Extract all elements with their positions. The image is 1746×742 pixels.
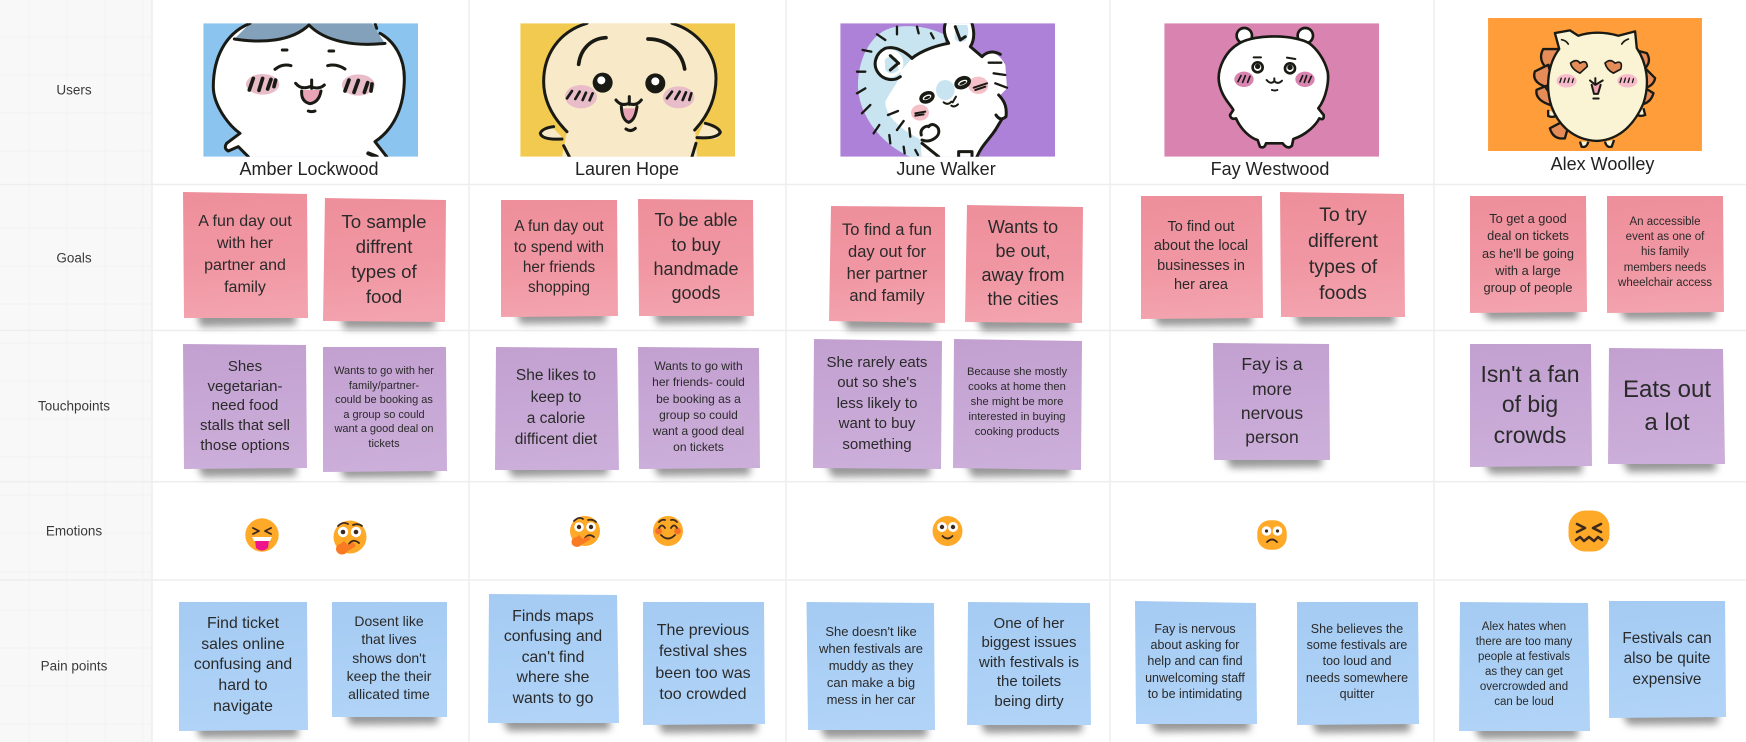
sticky: Amber pain 2	[332, 602, 447, 725]
sticky: Amber touchpoint 2: want a good deal on	[333, 423, 434, 435]
sticky: Alex pain 2: Festivals can	[1622, 630, 1712, 646]
avatar: Amber Lockwood	[203, 23, 418, 157]
emoji: confounded	[1568, 510, 1610, 552]
sticky: Amber touchpoint 2: tickets	[368, 438, 400, 450]
sticky: Alex pain 1: can be loud	[1494, 696, 1554, 708]
sticky: Alex goal 1: To get a good	[1489, 210, 1567, 226]
sticky: Alex goal 2: his family	[1641, 246, 1689, 258]
sticky: June pain 1: mess in her car	[827, 692, 916, 706]
sticky: June pain 2: biggest issues	[981, 634, 1077, 650]
sticky: Lauren goal 1: shopping	[528, 278, 590, 296]
sticky: Alex touchpoint 2: a lot	[1644, 408, 1690, 436]
name: Fay Westwood: Fay Westwood	[1211, 159, 1329, 179]
sticky: June pain 2: with festivals is	[978, 654, 1079, 670]
sticky: Lauren pain 2: The previous	[657, 622, 749, 638]
sticky: Alex touchpoint 2	[1608, 348, 1725, 472]
sticky: Amber goal 2	[323, 198, 446, 329]
sticky: Lauren goal 1: A fun day out	[514, 218, 604, 234]
sticky: June goal 1	[829, 206, 945, 330]
sticky: Amber goal 1: family	[224, 278, 266, 296]
sticky: June goal 1: day out for	[848, 243, 926, 261]
sticky: Fay goal 1: businesses in	[1157, 258, 1245, 274]
sticky: Lauren touchpoint 2: be booking as a	[656, 392, 741, 406]
sticky: Fay goal 1: about the local	[1154, 238, 1248, 254]
sticky: Lauren pain 1: where she	[516, 668, 590, 686]
sticky: Fay pain 1: Fay is nervous	[1154, 622, 1236, 636]
sticky: Lauren goal 2: to buy	[671, 235, 721, 255]
sticky: June goal 1: and family	[849, 287, 925, 305]
sticky: June goal 1: To find a fun	[842, 221, 932, 239]
sticky: Amber pain 1: navigate	[213, 698, 273, 714]
sticky: June goal 2: be out,	[995, 241, 1051, 261]
name: Amber Lockwood: Amber Lockwood	[239, 159, 379, 179]
sticky: Lauren touchpoint 1: keep to	[531, 388, 581, 406]
sticky: Amber pain 2: Dosent like	[354, 613, 424, 629]
sticky: June touchpoint 2: interested in buying	[968, 411, 1066, 423]
sticky: Amber touchpoint 2: a group so could	[343, 409, 425, 421]
sticky: Amber pain 1: confusing and	[194, 656, 292, 672]
sticky: Fay pain 1: to be intimidating	[1148, 687, 1242, 701]
sticky: June touchpoint 1: out so she's	[837, 374, 917, 390]
sticky: Amber goal 2: To sample	[341, 210, 427, 232]
sticky: Fay pain 2: needs somewhere	[1306, 671, 1408, 685]
sticky: Alex goal 1: with a large	[1494, 262, 1561, 278]
sticky: Amber touchpoint 1: need food	[212, 396, 278, 414]
sticky: Fay touchpoint: more	[1252, 379, 1292, 399]
sticky: June touchpoint 2: she might be more	[971, 396, 1063, 408]
sticky: Lauren touchpoint 2	[638, 347, 760, 476]
sticky: June touchpoint 1	[813, 339, 942, 477]
sticky: Lauren touchpoint 1: a calorie	[527, 410, 585, 426]
sticky: Alex pain 1: as they can get	[1485, 666, 1564, 678]
sticky: Amber pain 2: that lives	[361, 631, 417, 647]
label: Emotions: Emotions	[46, 524, 102, 538]
sticky: Alex goal 1: as he'll be going	[1482, 246, 1574, 260]
sticky: Alex goal 2	[1607, 196, 1724, 320]
sticky: Fay pain 2: quitter	[1340, 687, 1374, 701]
sticky: June goal 2: Wants to	[988, 217, 1058, 237]
sticky: Alex pain 2	[1609, 601, 1726, 725]
sticky: Fay touchpoint: nervous	[1241, 403, 1303, 423]
sticky: June pain 1: muddy as they	[829, 658, 914, 672]
sticky: Fay goal 1	[1141, 196, 1263, 326]
sticky: June goal 2: away from	[981, 265, 1065, 285]
sticky: June goal 1: her partner	[847, 265, 928, 283]
sticky: Alex goal 2: members needs	[1624, 262, 1706, 274]
sticky: Fay goal 1: To find out	[1168, 219, 1234, 235]
sticky: Lauren goal 2	[638, 199, 754, 324]
sticky: June touchpoint 1: something	[842, 436, 912, 452]
sticky: June touchpoint 2: cooks at home then	[968, 381, 1066, 393]
sticky: Alex touchpoint 2: Eats out	[1623, 376, 1711, 402]
sticky: Alex goal 2: An accessible	[1630, 216, 1700, 228]
sticky: Lauren pain 1: can't find	[522, 648, 584, 666]
sticky: June pain 2: being dirty	[994, 692, 1064, 710]
sticky: Alex pain 1: people at festivals	[1478, 651, 1570, 663]
sticky: June goal 2: the cities	[987, 289, 1059, 309]
sticky: Amber goal 1: A fun day out	[198, 212, 292, 230]
sticky: Fay pain 2: some festivals are	[1307, 638, 1407, 652]
sticky: Amber pain 2: keep the their	[347, 668, 432, 684]
sticky: June touchpoint 2: Because she mostly	[967, 366, 1067, 378]
sticky: Fay pain 1: unwelcoming staff	[1145, 671, 1245, 685]
sticky: Lauren pain 2: festival shes	[659, 642, 747, 660]
sticky: Alex pain 1	[1459, 602, 1590, 739]
sticky: Amber goal 2: types of	[351, 260, 418, 282]
sticky: June pain 1: when festivals are	[818, 640, 923, 656]
sticky: Lauren pain 2: been too was	[655, 664, 751, 682]
sticky: Fay touchpoint: person	[1245, 427, 1299, 447]
sticky: Lauren pain 1: wants to go	[512, 690, 594, 706]
name: Alex Woolley: Alex Woolley	[1551, 154, 1654, 174]
sticky: Lauren touchpoint 1: difficent diet	[515, 430, 598, 448]
sticky: Fay goal 2: To try	[1319, 204, 1367, 226]
sticky: June pain 2: One of her	[994, 614, 1064, 632]
sticky: June touchpoint 1: She rarely eats	[827, 354, 927, 370]
sticky: Fay pain 1	[1135, 601, 1257, 732]
label: Touchpoints: Touchpoints	[38, 398, 110, 414]
sticky: Fay pain 1: about asking for	[1151, 638, 1239, 652]
avatar: Fay Westwood	[1164, 23, 1379, 157]
sticky: Lauren goal 1: her friends	[523, 258, 595, 276]
sticky: Fay pain 2: She believes the	[1311, 622, 1403, 636]
sticky: Lauren touchpoint 1	[495, 347, 619, 477]
sticky: Alex touchpoint 1: of big	[1502, 391, 1558, 417]
sticky: Alex goal 1: deal on tickets	[1487, 228, 1569, 242]
sticky: Fay goal 2: types of	[1309, 256, 1378, 278]
sticky: June touchpoint 2: cooking products	[975, 426, 1060, 438]
sticky: Amber pain 1: Find ticket	[207, 614, 280, 632]
panel: pain points row	[179, 594, 1726, 739]
sticky: Lauren goal 1: to spend with	[514, 238, 604, 256]
sticky: Amber touchpoint 2: Wants to go with her	[334, 365, 434, 377]
avatar: June Walker	[840, 23, 1055, 157]
sticky: Fay touchpoint	[1213, 343, 1330, 468]
sticky: Amber goal 1: with her	[216, 234, 274, 252]
sticky: Amber pain 1: hard to	[218, 676, 268, 694]
sticky: Lauren goal 1	[501, 200, 618, 324]
sticky: June pain 1: can make a big	[827, 674, 915, 690]
emoji: thinking	[570, 516, 600, 547]
sticky: Fay pain 2	[1297, 602, 1419, 733]
sticky: Alex touchpoint 1: crowds	[1494, 422, 1566, 448]
sticky: Amber goal 1	[183, 192, 308, 327]
sticky: Lauren goal 2: goods	[671, 283, 721, 303]
sticky: Alex pain 1: Alex hates when	[1482, 621, 1566, 633]
label: Goals: Goals	[56, 250, 92, 266]
sticky: Lauren pain 2: too crowded	[659, 686, 747, 702]
sticky: Amber pain 2: allicated time	[348, 686, 430, 702]
sticky: Lauren touchpoint 1: She likes to	[516, 366, 596, 384]
sticky: Fay pain 2: too loud and	[1323, 654, 1391, 668]
sticky: Alex pain 2: also be quite	[1624, 650, 1710, 666]
sticky: Lauren touchpoint 2: want a good deal	[652, 424, 744, 438]
sticky: June pain 1: She doesn't like	[825, 624, 917, 638]
sticky: June pain 1	[806, 602, 935, 738]
sticky: Lauren pain 1: Finds maps	[512, 608, 594, 624]
emoji: happy	[932, 516, 962, 546]
sticky: June touchpoint 2	[953, 339, 1082, 477]
sticky: Amber goal 2: food	[366, 286, 402, 306]
sticky: Amber pain 1	[179, 602, 308, 738]
sticky: Lauren pain 1: confusing and	[504, 628, 602, 644]
sticky: Amber pain 2: shows don't	[352, 650, 426, 666]
sticky: Lauren goal 2: To be able	[654, 210, 738, 230]
sticky: Alex goal 1: group of people	[1484, 280, 1572, 294]
sticky: Amber goal 1: partner and	[204, 256, 286, 274]
sticky: Alex touchpoint 1	[1470, 344, 1592, 474]
emoji: thinking	[334, 520, 366, 554]
sticky: Amber goal 2: diffrent	[356, 236, 413, 256]
panel: touchpoints row	[183, 339, 1725, 478]
sticky: Fay goal 2: foods	[1319, 282, 1367, 304]
sticky: Lauren touchpoint 2: Wants to go with	[654, 359, 743, 373]
sticky: Lauren goal 2: handmade	[653, 259, 739, 279]
sticky: Fay goal 2	[1280, 192, 1405, 325]
row labels	[38, 82, 110, 674]
sticky: Amber touchpoint 1: vegetarian-	[207, 378, 283, 394]
panel: users row	[203, 18, 1702, 179]
sticky: Lauren touchpoint 2: on tickets	[673, 440, 724, 454]
sticky: Fay pain 1: help and can find	[1147, 654, 1243, 668]
sticky: Amber touchpoint 2	[323, 347, 447, 478]
sticky: Amber touchpoint 2: could be booking as	[335, 394, 433, 406]
sticky: June touchpoint 1: want to buy	[838, 414, 916, 432]
sticky: Alex goal 1	[1470, 196, 1587, 320]
sticky: Fay touchpoint: Fay is a	[1241, 354, 1303, 374]
panel: emotions row	[245, 510, 1609, 554]
name: Lauren Hope: Lauren Hope	[575, 159, 679, 179]
sticky: Alex goal 2: wheelchair access	[1617, 277, 1712, 289]
sticky: Amber pain 1: sales online	[201, 636, 285, 652]
sticky: Amber touchpoint 1: Shes	[228, 358, 262, 374]
sticky: June goal 2	[965, 205, 1083, 331]
sticky: Lauren touchpoint 2: her friends- could	[652, 375, 745, 389]
sticky: Fay goal 1: her area	[1174, 277, 1229, 293]
sticky: Amber touchpoint 1: those options	[200, 436, 290, 454]
sticky: June pain 2	[967, 602, 1091, 733]
sticky: June pain 2: the toilets	[997, 672, 1061, 690]
avatar: Alex Woolley	[1488, 18, 1702, 151]
avatar: Lauren Hope	[520, 23, 735, 157]
sticky: Alex pain 1: overcrowded and	[1480, 681, 1568, 693]
emoji: worried	[1257, 520, 1287, 550]
label: Pain points: Pain points	[41, 658, 108, 674]
sticky: Fay goal 2: different	[1308, 230, 1379, 252]
sticky: Alex pain 2: expensive	[1633, 670, 1701, 688]
emoji: squinting tongue	[245, 518, 279, 552]
sticky: Alex touchpoint 1: Isn't a fan	[1480, 361, 1580, 387]
sticky: Lauren touchpoint 2: group so could	[659, 408, 738, 422]
sticky: Lauren pain 2	[643, 602, 765, 733]
sticky: Amber touchpoint 2: family/partner-	[349, 380, 419, 392]
label: Users: Users	[56, 82, 92, 98]
panel: goals row	[183, 192, 1724, 331]
name: June Walker: June Walker	[896, 159, 996, 179]
sticky: Amber touchpoint 1	[183, 344, 307, 477]
sticky: Lauren pain 1	[488, 594, 619, 731]
sticky: Alex goal 2: event as one of	[1626, 231, 1705, 243]
emoji: smiling	[653, 516, 683, 546]
sticky: June touchpoint 1: less likely to	[837, 394, 917, 412]
sticky: Amber touchpoint 1: stalls that sell	[200, 416, 290, 434]
sticky: Alex pain 1: there are too many	[1476, 636, 1573, 648]
